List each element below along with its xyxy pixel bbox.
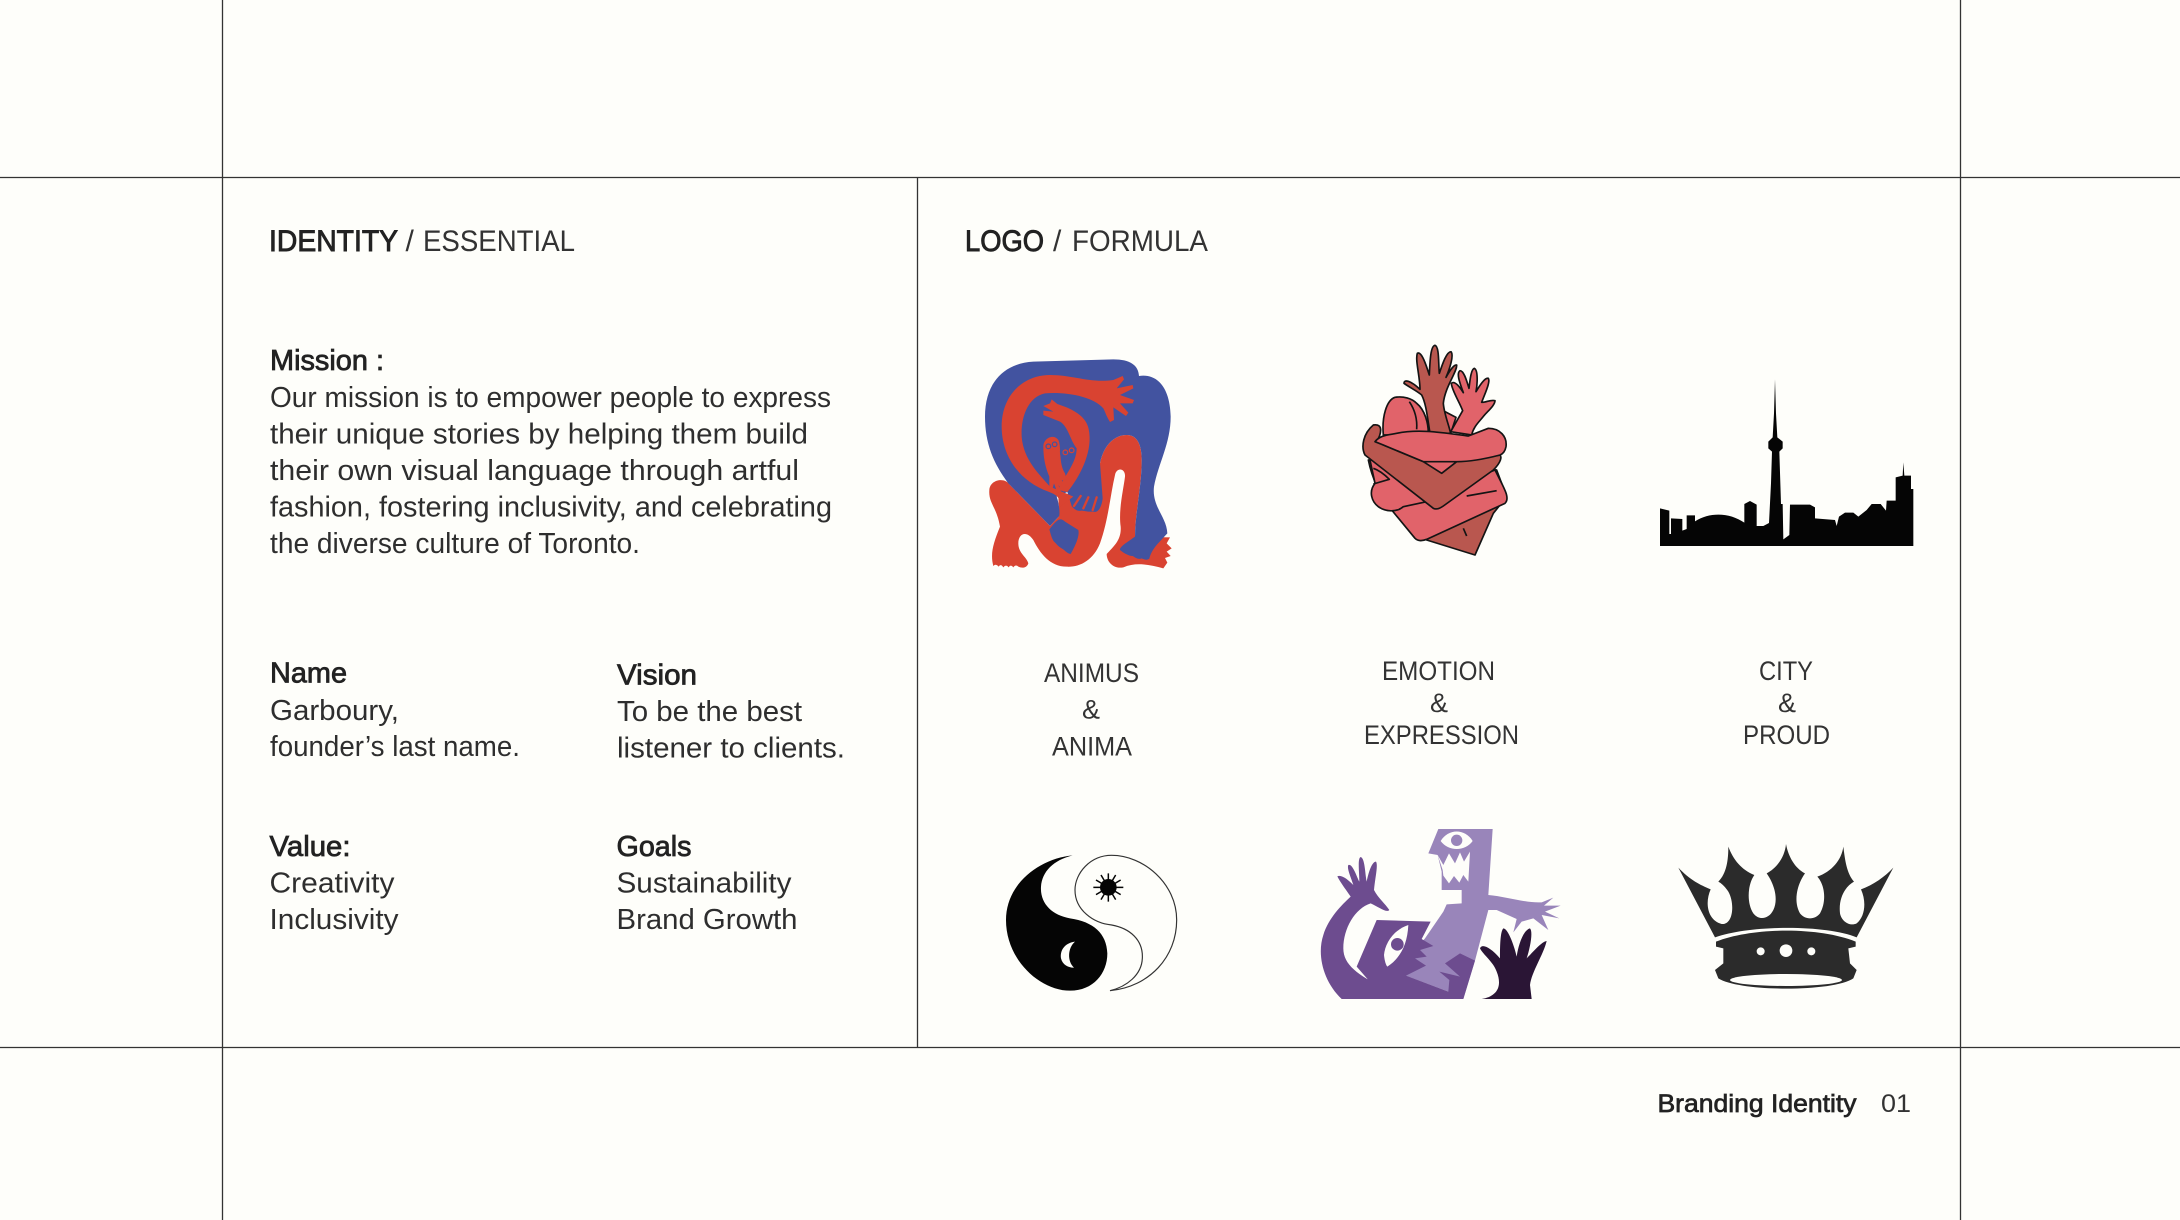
text block: vision: To be the best [617,696,802,728]
heading: identity essential: / [406,225,414,258]
text block: mission: their unique stories by helping them build [270,418,808,450]
text block: name: Garboury, [270,695,399,727]
red inner arm [1043,399,1090,492]
text block: mission [270,345,832,560]
text block: mission: fashion, fostering inclusivity, and celebrating [270,492,832,524]
red outer arm [1002,375,1134,507]
icon: toronto skyline [1660,379,1913,546]
caption: emotion and expression: EXPRESSION [1364,720,1519,750]
heart base [1368,460,1507,555]
icon: purple monsters [1321,829,1561,999]
shoulder [1383,397,1428,435]
panel: identity essential [269,225,845,936]
lower left arm [1370,460,1457,511]
blue head [1060,442,1076,461]
text block: goals: Goals [616,831,692,863]
caption: animus and anima: & [1082,694,1100,724]
text block: mission: their own visual language through artful [270,455,799,487]
caption: animus and anima: ANIMA [1052,732,1132,762]
crown opening [1730,974,1842,986]
crossing dark arm [1363,425,1501,509]
text block: mission: Our mission is to empower people to express [270,382,831,414]
text block: mission: the diverse culture of Toronto. [270,528,640,560]
caption: emotion and expression [1364,656,1519,750]
moon [1061,942,1075,968]
yang outline [1075,855,1177,991]
text block: name: founder’s last name. [270,731,520,763]
icon: animus and anima figures [985,359,1172,568]
light monster [1406,829,1561,999]
raised hand dark [1404,345,1457,433]
caption: city and proud [1743,656,1830,750]
text block: value: Value: [270,831,350,863]
icon: yin yang with sun and moon [1006,855,1177,991]
icon: hugging heart [1363,345,1507,555]
caption: animus and anima [1044,658,1139,762]
right shoulder behind hands [1445,412,1456,433]
lower right arm [1392,470,1507,541]
crown band [1715,931,1857,989]
footer: page label: Branding Identity [1658,1090,1857,1118]
upper light arm [1375,428,1506,462]
text block: name [270,658,520,763]
caption: emotion and expression: & [1430,688,1448,718]
text block: vision: Vision [617,660,697,692]
text block: goals: Brand Growth [616,904,798,936]
panel: logo formula [965,225,1913,999]
caption: city and proud: PROUD [1743,720,1830,750]
heading: logo formula: FORMULA [1072,225,1208,258]
light monster eye [1441,831,1473,849]
text block: value: Inclusivity [270,904,399,936]
heading: identity essential [269,225,575,258]
red head and small arm [1043,437,1067,493]
text block: vision [617,660,845,764]
dark monster [1321,857,1475,999]
red gaps between blue fingers [1074,496,1097,510]
caption: animus and anima: ANIMUS [1044,658,1139,688]
heading: logo formula: LOGO [965,225,1044,258]
heading: logo formula [965,225,1208,258]
red lower body and legs [989,435,1172,568]
blue foot [1049,519,1079,554]
caption: city and proud: CITY [1759,656,1813,686]
icon: crown [1678,844,1893,989]
caption: emotion and expression: EMOTION [1382,656,1495,686]
caption: city and proud: & [1778,688,1796,718]
text block: vision: listener to clients. [617,732,845,764]
crown jewels [1757,944,1815,957]
footer: page label: 01 [1881,1090,1911,1118]
dark monster eye [1384,925,1408,967]
heading: logo formula: / [1053,225,1062,258]
text block: value: Creativity [270,868,395,900]
heading: identity essential: IDENTITY [269,225,398,258]
text block: mission: Mission : [270,345,384,377]
crown spikes [1678,844,1893,937]
raised hand light [1451,368,1495,435]
blue main body [985,359,1171,560]
dark hand [1480,928,1547,999]
light monster mouth [1438,852,1470,883]
text block: goals [616,831,798,936]
sun [1093,873,1123,902]
text block: name: Name [270,658,347,690]
eyes [1046,442,1074,455]
text block: goals: Sustainability [616,868,792,900]
heading: identity essential: ESSENTIAL [423,225,575,258]
yin side [1006,855,1107,991]
text block: value [270,831,399,936]
